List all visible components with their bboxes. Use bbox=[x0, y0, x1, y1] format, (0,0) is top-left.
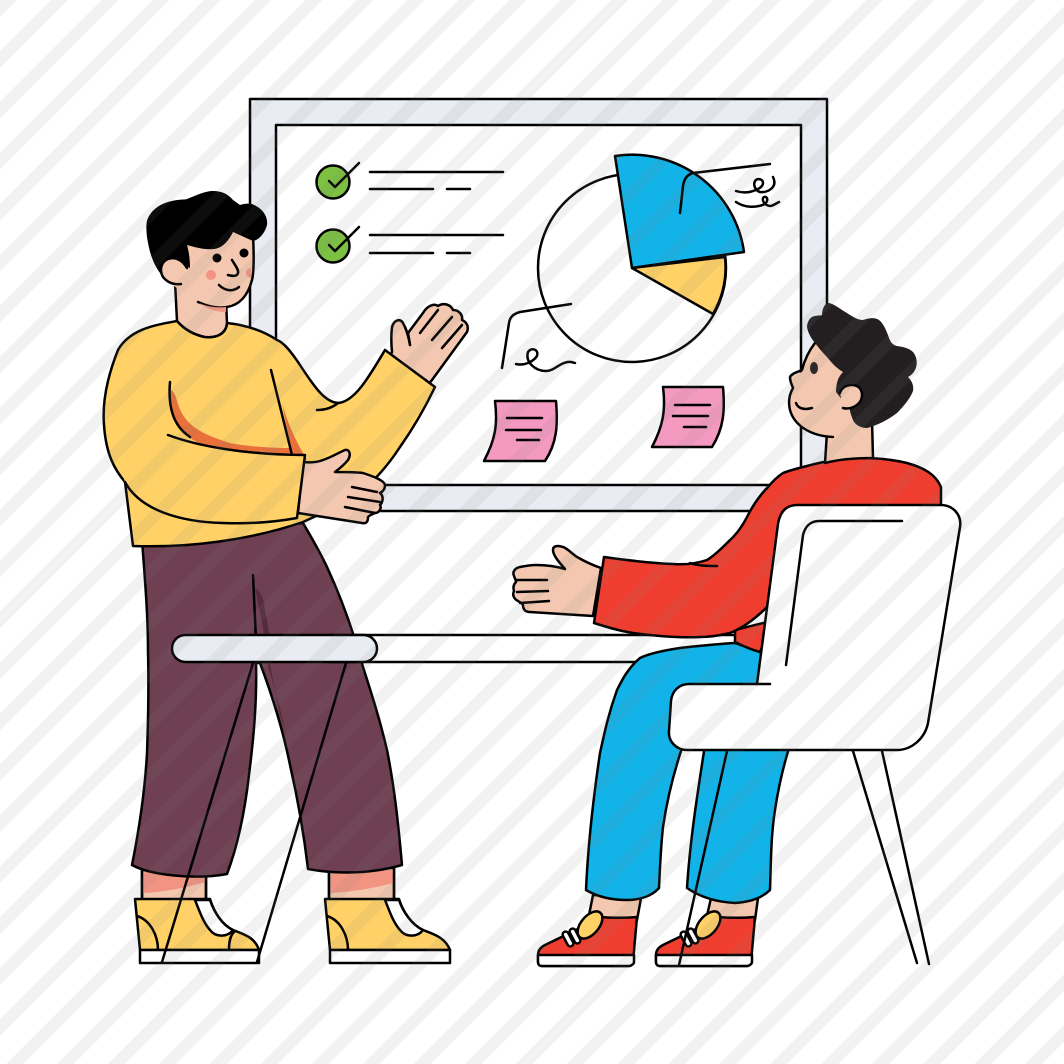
chair leg back bbox=[882, 751, 929, 964]
seated colleague bbox=[513, 303, 941, 966]
shoe: red right bbox=[656, 907, 755, 966]
hand reaching forward bbox=[513, 546, 601, 616]
chair bbox=[669, 505, 960, 964]
red back and arm bbox=[594, 458, 941, 652]
sweater fold shadow bbox=[170, 390, 292, 455]
raised hand bbox=[385, 304, 468, 395]
hair bbox=[807, 303, 917, 428]
table leg right bbox=[679, 751, 727, 965]
shoe: left yellow bbox=[135, 899, 259, 963]
trousers: front leg bbox=[586, 643, 765, 900]
eye bbox=[810, 362, 818, 374]
pie chart bbox=[538, 155, 744, 362]
backrest inner line bbox=[786, 521, 902, 665]
trousers bbox=[132, 523, 402, 877]
sweater side shadow bbox=[282, 403, 307, 460]
board surface bbox=[276, 125, 801, 485]
presenter standing bbox=[104, 191, 468, 963]
pie wedge: yellow bbox=[632, 257, 726, 314]
sticky note: right bbox=[652, 387, 724, 447]
trousers: back leg bbox=[687, 745, 790, 903]
check item one bbox=[316, 163, 503, 198]
sleeve cuff bbox=[115, 430, 305, 523]
head bbox=[789, 303, 917, 437]
hair bbox=[146, 191, 267, 273]
eyes bbox=[212, 254, 222, 262]
check item two bbox=[316, 227, 503, 262]
neck bbox=[825, 420, 873, 463]
seat line bbox=[757, 683, 770, 685]
callout: upper right note bbox=[680, 164, 779, 213]
ear bbox=[840, 385, 862, 409]
nose and smile bbox=[219, 260, 239, 290]
table edge bbox=[172, 635, 377, 662]
chair shell bbox=[669, 505, 960, 750]
neck bbox=[175, 282, 227, 337]
table leg left bbox=[162, 663, 253, 962]
pie wedge: blue bbox=[615, 155, 744, 268]
cheeks bbox=[206, 270, 216, 280]
cuff outline bbox=[125, 435, 305, 523]
shoe: right yellow bbox=[325, 899, 450, 963]
shoe: red left bbox=[538, 907, 637, 966]
table top bbox=[330, 635, 740, 662]
board frame bbox=[250, 99, 827, 511]
checklist bbox=[316, 163, 503, 262]
sweater bbox=[104, 321, 435, 546]
sticky note: left bbox=[484, 401, 557, 461]
callout: lower left note bbox=[502, 304, 575, 371]
lower hand bbox=[298, 450, 385, 523]
ankles bbox=[142, 868, 394, 900]
table leg middle bbox=[257, 663, 346, 962]
table bbox=[162, 635, 740, 962]
chair leg front bbox=[853, 751, 917, 963]
ankles bbox=[588, 895, 758, 920]
ear bbox=[161, 258, 187, 284]
smile bbox=[796, 403, 812, 409]
whiteboard bbox=[250, 99, 827, 511]
head bbox=[146, 191, 267, 312]
